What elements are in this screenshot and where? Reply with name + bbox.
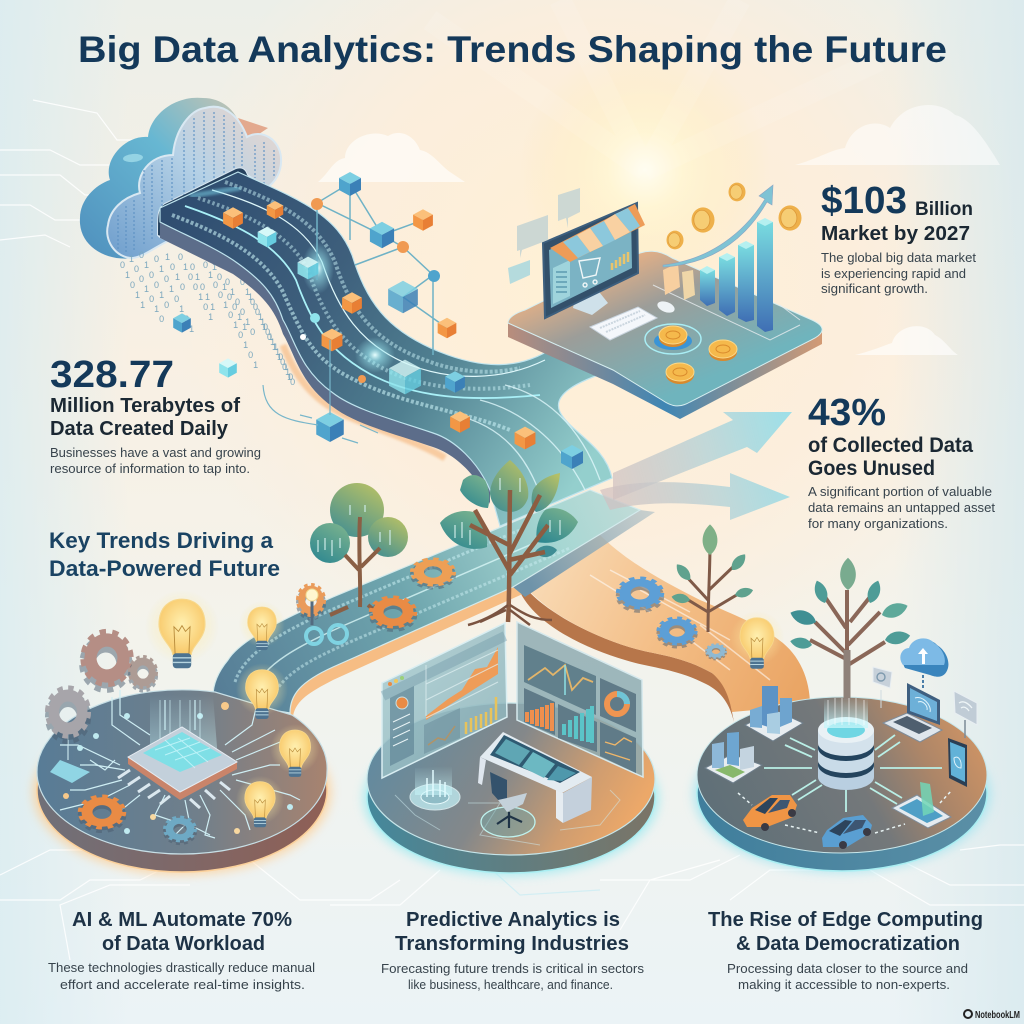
heading: daily data figure: resource of information to tap into. bbox=[50, 461, 250, 476]
icon: teal connector glyphs bbox=[306, 589, 347, 644]
heading: market figure: The global big data market bbox=[821, 251, 977, 265]
platform coins bbox=[645, 324, 737, 384]
growth arrow bbox=[663, 185, 773, 267]
icon: database bbox=[818, 698, 874, 790]
tree: round crown on road bbox=[310, 483, 408, 615]
caption: edge computing: Processing data closer to the source and bbox=[727, 961, 968, 976]
tree: small tree on orange road bbox=[671, 524, 754, 632]
tree: central data tree bbox=[440, 460, 578, 625]
cloud with data stream bbox=[80, 98, 281, 259]
binary rain below cloud: 01001011010 bbox=[240, 277, 295, 387]
heading: daily data figure: 328.77 bbox=[50, 354, 174, 396]
platform: edge computing bbox=[693, 697, 991, 873]
binary rain below cloud: 01001010101 bbox=[203, 260, 258, 370]
caption: predictive analytics bbox=[381, 909, 644, 992]
binary rain below cloud: 0100101 bbox=[178, 252, 213, 322]
caption: edge computing: making it accessible to non-experts. bbox=[738, 977, 950, 992]
heading: key trends: Key Trends Driving a bbox=[49, 528, 274, 553]
caption: AI and ML: AI & ML Automate 70% bbox=[72, 909, 292, 931]
icon: smartphone bbox=[948, 738, 967, 787]
heading: market figure: Billion bbox=[915, 199, 973, 220]
road: orange trend path bbox=[519, 535, 810, 722]
platform: predictive analytics bbox=[363, 703, 659, 876]
binary rain below cloud: 101011010 bbox=[248, 292, 293, 382]
market platform bbox=[508, 251, 822, 419]
heading: daily data figure: Businesses have a vast and growing bbox=[50, 445, 261, 460]
heading: unused data figure bbox=[808, 392, 995, 531]
arrow: transparent upper arrow bbox=[613, 412, 792, 500]
heading: unused data figure: data remains an untapped asset bbox=[808, 500, 995, 515]
heading: daily data figure bbox=[50, 354, 261, 476]
caption: predictive analytics: like business, healthcare, and finance. bbox=[408, 977, 613, 992]
platform: AI and ML bbox=[33, 690, 331, 875]
growth bar chart bbox=[663, 218, 773, 332]
icon: upload cloud bbox=[900, 638, 948, 688]
heading: unused data figure: 43% bbox=[808, 392, 886, 434]
binary rain below cloud: 1001010 bbox=[129, 254, 164, 324]
icon: tablet with hologram bbox=[892, 782, 951, 828]
icons: gears around chip bbox=[48, 628, 195, 843]
caption: AI and ML bbox=[48, 909, 315, 992]
caption: edge computing: The Rise of Edge Computing bbox=[708, 909, 983, 931]
heading: unused data figure: of Collected Data bbox=[808, 434, 973, 457]
binary rain below cloud: 1010 bbox=[165, 252, 185, 292]
caption: predictive analytics: Forecasting future trends is critical in sectors bbox=[381, 961, 644, 976]
heading: unused data figure: A significant portion of valuable bbox=[808, 484, 992, 499]
chart panel: left dashboard bbox=[382, 623, 507, 778]
caption: AI and ML: These technologies drastically reduce manual bbox=[48, 960, 315, 975]
binary rain below cloud: 01010101 bbox=[154, 254, 194, 334]
tree: growth tree on edge platform bbox=[788, 558, 911, 700]
icon: wifi sign bbox=[954, 691, 977, 738]
chart panel: right dashboard bbox=[517, 622, 643, 777]
icon: city blocks bbox=[705, 686, 803, 783]
heading: market figure: $103 bbox=[821, 180, 907, 222]
heading: key trends bbox=[49, 528, 280, 581]
icon: orange car bbox=[743, 795, 797, 831]
gears on roads bbox=[298, 559, 725, 659]
control desk and chair bbox=[478, 732, 592, 828]
icon: AI microchip bbox=[118, 727, 237, 808]
caption: edge computing: & Data Democratization bbox=[736, 933, 960, 955]
keyboard and mouse bbox=[590, 299, 676, 340]
heading: key trends: Data-Powered Future bbox=[49, 556, 280, 581]
binary rain below cloud: 101101 bbox=[262, 322, 292, 382]
binary rain below cloud: 010010 bbox=[139, 250, 169, 310]
heading: daily data figure: Million Terabytes of bbox=[50, 395, 240, 417]
sky clouds bbox=[318, 105, 1000, 355]
caption: AI and ML: effort and accelerate real-time insights. bbox=[60, 977, 305, 992]
heading: market figure: is experiencing rapid and bbox=[821, 267, 966, 281]
floating coins bbox=[666, 183, 802, 249]
binary rain below cloud: 1010011 bbox=[212, 262, 247, 332]
heading: daily data figure: Data Created Daily bbox=[50, 418, 229, 440]
binary rain below cloud: 01011 bbox=[190, 262, 215, 312]
heading: market figure: Market by 2027 bbox=[821, 223, 970, 245]
icon: lock sign bbox=[873, 667, 892, 708]
market monitor with shop awning bbox=[543, 203, 645, 318]
binary rain below cloud: 01011 bbox=[120, 260, 145, 310]
heading: market figure bbox=[821, 180, 977, 296]
binary rain below cloud bbox=[120, 250, 295, 387]
heading: market figure: significant growth. bbox=[821, 282, 928, 296]
heading: unused data figure: Goes Unused bbox=[808, 457, 935, 480]
icon: laptop bbox=[883, 683, 942, 742]
title: Big Data Analytics: Trends Shaping the Future bbox=[78, 29, 947, 70]
heading: unused data figure: for many organizations. bbox=[808, 516, 948, 531]
speech bubbles bbox=[508, 188, 580, 284]
road: teal lower path to AI platform bbox=[213, 490, 655, 716]
caption: predictive analytics: Predictive Analytics is bbox=[406, 909, 620, 931]
icons: light bulbs bbox=[145, 590, 784, 827]
caption: edge computing bbox=[708, 909, 983, 992]
arrow: transparent lower arrow bbox=[600, 473, 790, 520]
icon: blue car bbox=[822, 815, 872, 849]
caption: AI and ML: of Data Workload bbox=[102, 933, 265, 955]
caption: predictive analytics: Transforming Industries bbox=[395, 933, 629, 955]
binary rain below cloud: 010010 bbox=[225, 277, 255, 337]
road: data highway from cloud to market bbox=[160, 172, 613, 526]
network nodes above road bbox=[173, 172, 583, 469]
